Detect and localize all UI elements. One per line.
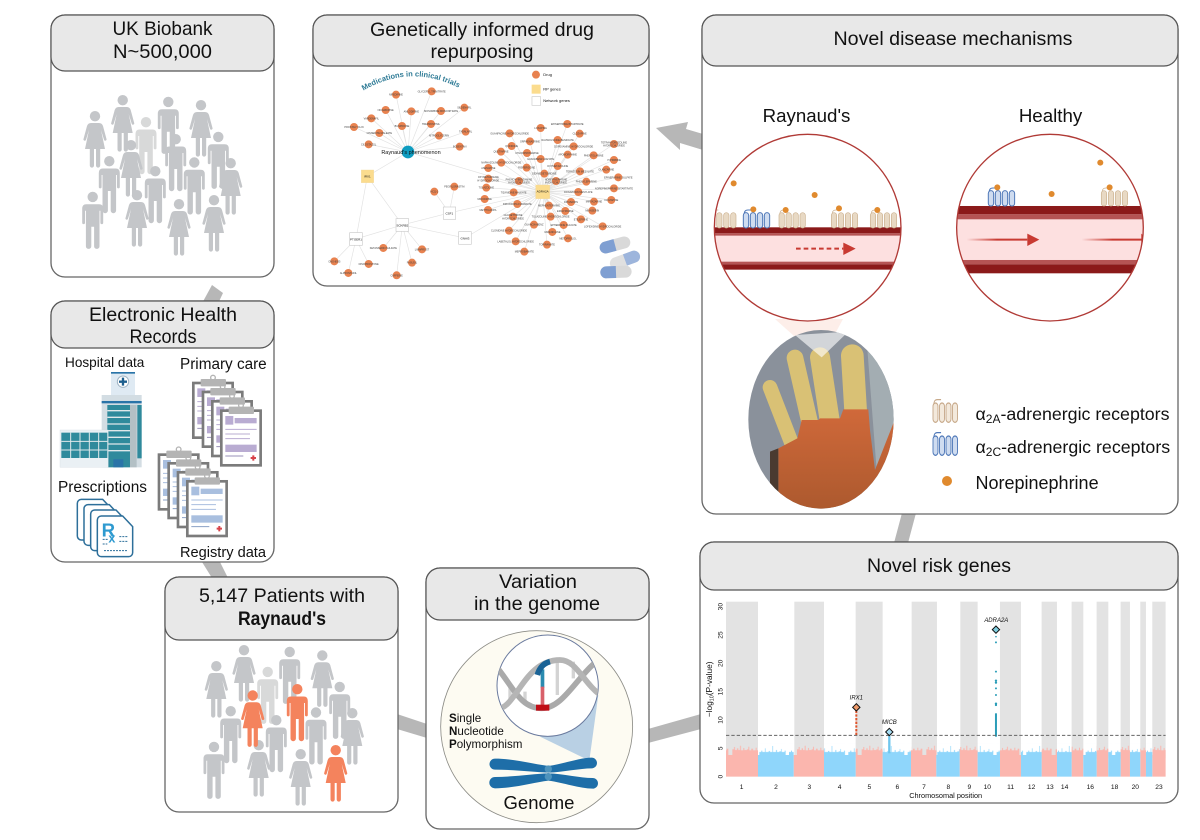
drug labels: CLONIDINE HYDROCHLORIDE	[491, 230, 527, 233]
marker: MICB: MICB	[882, 720, 897, 726]
drug labels: ETILEFRINE	[574, 218, 588, 221]
legend: alpha 2A receptors: α	[976, 404, 986, 424]
network legend	[532, 71, 570, 105]
drug labels: GUANETHIDINE	[504, 214, 523, 217]
legend: alpha 2A receptors	[933, 400, 1170, 426]
drug labels: APOMORPHINE	[558, 154, 577, 157]
marker: ADRA2A: ADRA2A	[983, 618, 1008, 624]
label: Registry data: Registry data	[180, 545, 267, 561]
heading: Novel risk genes: Novel risk genes	[867, 555, 1011, 577]
drug labels: CILOSTAZOL	[361, 143, 377, 146]
drug labels: OLANZAPINE	[598, 169, 615, 172]
legend	[933, 400, 1170, 493]
panel: Electronic Health Records	[51, 301, 274, 562]
legend: alpha 2C receptors: -adrenergic receptors	[1001, 437, 1170, 457]
drug labels: HYDROCHLORIDE	[603, 145, 625, 148]
network legend: Network genes	[543, 98, 570, 103]
heading: Variation in the genome: Variation	[499, 571, 577, 593]
heading: Novel disease mechanisms: Novel disease mechanisms	[834, 28, 1073, 50]
drug labels: GUANABENZ ACETATE	[527, 158, 555, 161]
drug labels: EPINEPHRINE SULFATE	[604, 176, 633, 179]
icon: registry clipboards	[159, 447, 227, 536]
x axis tick labels: 20	[1132, 784, 1139, 791]
drug labels: TOLAZOLINE HYDROCHLORIDE	[532, 216, 570, 219]
drug labels: NIFEDIPINE	[389, 94, 403, 97]
drug labels: EPHEDRINE SULFATE	[551, 224, 577, 227]
y axis tick labels: 5	[718, 746, 725, 750]
x axis tick labels: 4	[838, 784, 842, 791]
panel: Variation in the genome	[426, 568, 649, 829]
x axis tick labels: 7	[922, 784, 926, 791]
RP gene: ADRA2A: ADRA2A	[537, 190, 549, 194]
x axis label: Chromosomal position	[909, 791, 982, 800]
label: Prescriptions: Prescriptions	[58, 479, 147, 496]
drug labels	[328, 90, 633, 277]
zoom cone	[540, 695, 598, 761]
heading: 5,147 Patients with Raynaud's	[165, 577, 398, 640]
chart: Manhattan plot	[704, 602, 1166, 800]
y axis label: (P-value)	[704, 661, 714, 695]
RP gene: IRX1	[361, 170, 374, 183]
icon: primary care clipboards	[193, 375, 261, 465]
y axis tick labels: 30	[718, 603, 725, 610]
network gene: GNAI3	[459, 232, 471, 244]
drug labels: ASENAPINE	[481, 167, 496, 170]
drug labels: OXYMETAZOLINE	[547, 165, 568, 168]
drug labels: MIRTAZAPINE	[586, 201, 603, 204]
drug labels: QUINIDINE	[505, 145, 518, 148]
y axis label: 10	[709, 695, 715, 701]
icon: prescriptions: x	[108, 532, 115, 546]
zoom cone from photo to vessel	[775, 319, 843, 360]
drug labels: CLOZAPINE	[573, 133, 587, 136]
heading: Variation in the genome	[426, 568, 649, 620]
drug labels: LABETALOL HYDROCHLORIDE	[497, 240, 534, 243]
x axis tick labels: 18	[1111, 784, 1119, 791]
drug labels: METHYLDOPA	[480, 209, 497, 212]
legend: alpha 2A receptors: -adrenergic receptors	[1000, 404, 1170, 424]
x axis tick labels: 12	[1028, 784, 1036, 791]
label: Primary care: Primary care	[180, 356, 267, 373]
drug labels: HYDROCHLORIDE	[477, 179, 500, 182]
drug labels: NOREPINEPHRINE	[545, 178, 567, 181]
panel: Novel risk genes	[700, 542, 1178, 803]
genome illustration	[441, 631, 633, 823]
drug labels: TADALAFIL	[459, 131, 473, 134]
icon: chromosome	[489, 758, 598, 789]
icon: patient crowd	[204, 645, 364, 806]
heading: UK Biobank: UK Biobank	[112, 18, 213, 40]
drug labels: HYDROCHLORIDE	[508, 182, 530, 185]
icon: DNA magnifier	[495, 635, 602, 736]
label: Single Nucleotide Polymorphism: Single	[449, 712, 481, 725]
drug labels: PHENTOLAMINE	[584, 154, 604, 157]
x axis tick labels: 3	[807, 784, 811, 791]
x axis tick labels	[740, 784, 1163, 791]
marker: IRX1	[850, 696, 863, 711]
icon: pills	[598, 235, 642, 279]
drug labels: TETRAHYDROZOLINE	[601, 141, 627, 144]
legend: alpha 2A receptors: 2A	[986, 412, 1000, 426]
heading: Electronic Health Records: Records	[130, 326, 197, 348]
legend: alpha 2C receptors: 2C	[986, 445, 1001, 459]
network gene: CSF1: CSF1	[445, 211, 453, 215]
drug labels: ISOSORBIDE MONONITRATE	[424, 110, 458, 113]
drug labels: YOHIMBINE	[607, 159, 621, 162]
drug labels: VARENICLINE	[544, 231, 561, 234]
panel: Genetically informed drug repurposing	[312, 14, 650, 287]
drug labels: BOSENTAN	[453, 146, 467, 149]
heading: UK Biobank: N~500,000	[113, 41, 212, 63]
label: Hospital data: Hospital data	[65, 355, 145, 370]
drug labels: NICARDIPINE	[378, 109, 394, 112]
drug labels: RISPERIDONE	[518, 167, 536, 170]
photo: Raynaud's hand	[747, 328, 897, 510]
drug labels: MIDODRINE	[478, 198, 492, 201]
diagram: Raynaud's constricted vessel	[714, 134, 902, 322]
arrow: disease mechanisms to drug repurposing	[656, 122, 703, 150]
drug labels: TIZANIDINE MALEATE	[501, 191, 527, 194]
y axis tick labels	[718, 603, 725, 778]
drug labels: DEXMEDETOMIDINE	[532, 173, 557, 176]
label: Genome: Genome	[504, 792, 574, 813]
drug labels: NOREPINEPHRINE BITARTRATE	[595, 187, 633, 190]
heading: 5,147 Patients with Raynaud's: 5,147 Patients with	[199, 585, 365, 607]
drug labels: PROSTACYCLIN	[344, 126, 364, 129]
x axis tick labels: 14	[1061, 784, 1069, 791]
drug labels: OXYMETAZOLINE	[478, 176, 499, 179]
drug labels: GLYCERYL TRINITRATE	[418, 90, 446, 93]
heading: Novel risk genes	[700, 542, 1178, 590]
drug labels: MEPROBAMATE	[515, 251, 534, 254]
icon: hospital building	[60, 372, 142, 467]
hub: Raynaud's phenomenon: Raynaud's phenomenon	[381, 150, 441, 156]
RP gene: IRX1: IRX1	[364, 174, 371, 178]
x axis tick labels: 11	[1007, 784, 1014, 791]
network title: Medications in clinical trials: Medications in clinical trials	[361, 71, 460, 90]
drug labels: ONO-8055	[328, 260, 341, 263]
heading: Novel disease mechanisms	[702, 15, 1178, 66]
network legend: Drug	[543, 72, 552, 77]
y axis label: −log	[704, 701, 714, 717]
label: Single Nucleotide Polymorphism: Nucleotide	[449, 725, 504, 738]
drug labels: AMLODIPINE	[404, 110, 419, 113]
drug labels: QUETIAPINE	[493, 151, 509, 154]
x axis tick labels: 13	[1046, 784, 1054, 791]
x axis tick labels: 8	[946, 784, 950, 791]
drug labels: DINOPROSTONE	[359, 263, 379, 266]
heading: Electronic Health Records	[51, 301, 274, 348]
heading: 5,147 Patients with Raynaud's: Raynaud's	[238, 608, 326, 630]
panel: Novel disease mechanisms	[700, 15, 1178, 514]
drug labels: TREPROSTINIL	[422, 123, 441, 126]
drug labels: LOXAPINE	[534, 127, 547, 130]
drug labels: TOLAZOLINE	[479, 187, 494, 190]
network gene: SCKRB2: SCKRB2	[396, 223, 409, 227]
legend: alpha 2C receptors	[933, 433, 1170, 459]
y axis tick labels: 25	[718, 631, 725, 639]
drug labels: NAPHAZOLINE HYDROCHLORIDE	[481, 162, 522, 165]
drug labels: DROXIDOPA FUMARATE	[503, 203, 532, 206]
drug labels: PEGFILGRASTIM	[444, 186, 464, 189]
x axis tick labels: 1	[740, 784, 744, 791]
network legend: RP genes	[543, 87, 561, 92]
chromosome background bands	[726, 602, 1166, 758]
heading: Genetically informed drug repurposing	[313, 15, 649, 66]
x axis tick labels: 10	[984, 784, 991, 791]
network gene: SCKRB2	[396, 219, 409, 231]
panel: UK Biobank	[51, 15, 274, 277]
x axis tick labels: 9	[967, 784, 971, 791]
y axis tick labels: 10	[718, 716, 725, 724]
drug labels: DIPIVEFRIN	[564, 201, 578, 204]
drug labels: PHENOXYBENZAMINE	[506, 178, 533, 181]
icon: prescriptions	[77, 499, 133, 557]
marker: MICB	[882, 720, 897, 736]
y axis tick labels: 0	[718, 774, 725, 778]
drug labels: GUANOXABENZ	[524, 224, 544, 227]
icon: prescriptions: R	[102, 520, 116, 541]
network gene: GNAI3: GNAI3	[461, 236, 470, 240]
drug labels: CLOZAPINE	[604, 199, 619, 202]
drug labels: NITROGLYCERIN	[429, 135, 449, 138]
heading: Genetically informed drug repurposing: Genetically informed drug	[370, 19, 594, 41]
drug labels: FASUDIL	[407, 262, 418, 265]
network gene: PTGER1: PTGER1	[350, 237, 362, 241]
drug labels: METOPROLOL	[559, 237, 577, 240]
heading: Electronic Health Records: Electronic Health	[89, 304, 237, 326]
drug labels: HYDROCHLORIDE	[502, 217, 524, 220]
drug labels: TOPIRAMATE	[539, 244, 555, 247]
icon: population crowd	[82, 95, 242, 256]
chart: drug-gene network	[328, 70, 640, 280]
drug labels: TERAZOSIN MESYLATE	[566, 170, 594, 173]
x axis tick labels: 2	[774, 784, 778, 791]
drug labels: MIANSERIN	[585, 210, 599, 213]
x axis tick labels: 5	[867, 784, 871, 791]
x axis tick labels: 16	[1087, 784, 1094, 791]
drug nodes	[330, 87, 622, 279]
drug labels: PHENYLEPHRINE	[576, 181, 597, 184]
panel: Patients with Raynaud's	[165, 577, 398, 812]
drug labels: MEPHENTERMINE	[538, 205, 560, 208]
y axis tick labels: 15	[718, 688, 725, 695]
RP gene: ADRA2A	[536, 185, 550, 199]
genome-wide significance line	[726, 734, 1166, 737]
heading: Genetically informed drug repurposing: repurposing	[430, 41, 534, 63]
diagram: Healthy vessel	[953, 134, 1153, 321]
legend: norepinephrine: Norepinephrine	[976, 473, 1099, 493]
drug labels: SILDENAFIL	[457, 107, 472, 110]
label: Raynaud's: Raynaud's	[763, 105, 850, 126]
drug labels: EPINEPHRINE BITARTRATE	[551, 123, 584, 126]
heading: Variation in the genome: in the genome	[474, 593, 600, 615]
drug labels: CINNEDITE MALEATE	[367, 132, 392, 135]
drug labels: ORPHENADRINE	[520, 140, 540, 143]
network gene: CSF1	[443, 207, 456, 219]
x axis tick labels: 23	[1155, 784, 1163, 791]
connector ring arrows	[202, 285, 916, 743]
marker: IRX1: IRX1	[850, 696, 863, 702]
drug labels: BUSPIRONE	[395, 125, 410, 128]
drug labels: GUANFACINE HYDROCHLORIDE	[490, 132, 529, 135]
significant peaks	[856, 636, 997, 753]
network gene: PTGER1	[350, 233, 362, 245]
drug labels: CHLORPROMAZINE	[515, 152, 539, 155]
drug labels: HCQ-1	[430, 191, 439, 194]
x axis tick labels: 6	[895, 784, 899, 791]
drug labels: VARDENAFIL	[364, 117, 380, 120]
heading: UK Biobank	[51, 15, 274, 71]
association skyline	[726, 744, 1166, 777]
y axis tick labels: 20	[718, 659, 725, 667]
marker: ADRA2A	[983, 618, 1008, 633]
hub: Raynaud's phenomenon	[381, 146, 441, 158]
drug labels: HYDROCHLORIDE	[545, 182, 567, 185]
drug labels: LOFEXIDINE HYDROCHLORIDE	[584, 225, 622, 228]
drug labels: LIMAPROST	[415, 248, 430, 251]
drug labels: KETANSERIN SULFATE	[370, 247, 397, 250]
label: Healthy: Healthy	[1019, 105, 1083, 126]
drug labels: DOXAZOSIN MESYLATE	[564, 191, 593, 194]
drug labels: RAUWOLSCINE BENZOATE	[541, 139, 574, 142]
drug labels: ERGOTAMINE	[557, 210, 574, 213]
network edges	[334, 91, 618, 275]
legend: alpha 2C receptors: α	[976, 437, 986, 457]
drug labels: CAFFEINE	[391, 274, 403, 277]
drug labels: DOPEXAMINE HYDROCHLORIDE	[554, 145, 594, 148]
drug labels: ALPROSTADIL	[340, 272, 357, 275]
label: Single Nucleotide Polymorphism: Polymorphism	[449, 738, 522, 751]
